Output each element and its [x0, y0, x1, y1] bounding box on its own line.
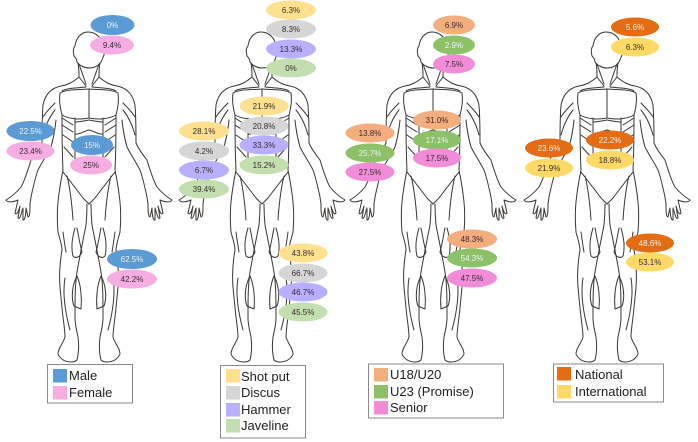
- legend: age categories: Senior: [390, 400, 428, 415]
- values: age categories by body region: 48.3%: [461, 235, 483, 244]
- values: throwing events by body region: 39.4%: [193, 185, 215, 194]
- values: competition levels by body region: 18.8%: [599, 156, 621, 165]
- values: male and female by body region: 9.4%: [103, 41, 121, 50]
- values: throwing events by body region: 13.3%: [280, 45, 302, 54]
- values: throwing events by body region: 45.5%: [292, 308, 314, 317]
- legend: throwing events: [220, 366, 306, 438]
- values: male and female by body region: 62.5%: [121, 255, 143, 264]
- values: throwing events by body region: [179, 0, 328, 322]
- values: male and female by body region: 23.4%: [19, 147, 42, 156]
- body figure: throwing event: [179, 32, 345, 362]
- values: male and female by body region: [6, 15, 157, 288]
- values: male and female by body region: 22.5%: [19, 127, 42, 136]
- values: competition levels by body region: 6.3%: [626, 43, 644, 52]
- values: age categories by body region: 27.5%: [359, 168, 381, 177]
- legend: gender: Female: [69, 385, 112, 400]
- values: age categories by body region: 6.9%: [445, 21, 463, 30]
- values: age categories by body region: 2.9%: [445, 41, 463, 50]
- legend: throwing events: Discus: [241, 385, 281, 400]
- values: age categories by body region: 7.5%: [445, 60, 463, 69]
- legend: gender: [48, 364, 132, 403]
- values: throwing events by body region: 28.1%: [193, 127, 215, 136]
- values: throwing events by body region: 43.8%: [292, 249, 314, 258]
- values: throwing events by body region: 66.7%: [292, 269, 314, 278]
- legend: age categories: U18/U20: [390, 367, 441, 382]
- values: competition levels by body region: [525, 18, 674, 272]
- values: age categories by body region: 17.5%: [426, 154, 448, 163]
- body figure: age category: [350, 32, 516, 362]
- legend: competition levels: National: [575, 367, 623, 382]
- values: male and female by body region: 25%: [83, 161, 99, 170]
- values: age categories by body region: [346, 16, 497, 288]
- values: male and female by body region: 0%: [107, 21, 118, 30]
- values: throwing events by body region: 33.3%: [253, 141, 275, 150]
- values: male and female by body region: 15%: [84, 141, 100, 150]
- values: throwing events by body region: 6.3%: [282, 6, 300, 15]
- values: throwing events by body region: 4.2%: [195, 147, 213, 156]
- values: throwing events by body region: 8.3%: [282, 25, 300, 34]
- legend: competition levels: International: [575, 384, 647, 399]
- values: competition levels by body region: 22.2%: [599, 136, 621, 145]
- values: competition levels by body region: 53.1%: [639, 258, 661, 267]
- values: throwing events by body region: 15.2%: [253, 161, 275, 170]
- values: throwing events by body region: 6.7%: [195, 166, 213, 175]
- values: age categories by body region: 17.1%: [426, 136, 448, 145]
- values: competition levels by body region: 5.6%: [626, 23, 644, 32]
- values: throwing events by body region: 21.9%: [253, 102, 275, 111]
- values: age categories by body region: 54.3%: [461, 254, 483, 263]
- values: competition levels by body region: 23.6%: [538, 144, 560, 153]
- values: age categories by body region: 31.0%: [426, 116, 448, 125]
- values: competition levels by body region: 21.9%: [538, 164, 560, 173]
- legend: throwing events: Hammer: [241, 402, 292, 417]
- legend: throwing events: Javeline: [241, 418, 289, 433]
- legend: gender: Male: [69, 368, 97, 383]
- legend: age categories: U23 (Promise): [390, 384, 474, 399]
- values: age categories by body region: 25.7%: [359, 149, 381, 158]
- body figure: gender: [6, 32, 172, 362]
- legend: age categories: [368, 364, 504, 418]
- values: throwing events by body region: 20.8%: [253, 122, 275, 131]
- legend: throwing events: Shot put: [241, 369, 290, 384]
- body figure: competition level: [524, 32, 690, 362]
- values: competition levels by body region: 48.6%: [639, 239, 661, 248]
- legend: competition levels: [554, 364, 664, 402]
- values: throwing events by body region: 46.7%: [292, 288, 314, 297]
- values: male and female by body region: 42.2%: [121, 275, 143, 284]
- values: throwing events by body region: 0%: [285, 64, 297, 73]
- values: age categories by body region: 13.8%: [359, 129, 381, 138]
- values: age categories by body region: 47.5%: [461, 274, 483, 283]
